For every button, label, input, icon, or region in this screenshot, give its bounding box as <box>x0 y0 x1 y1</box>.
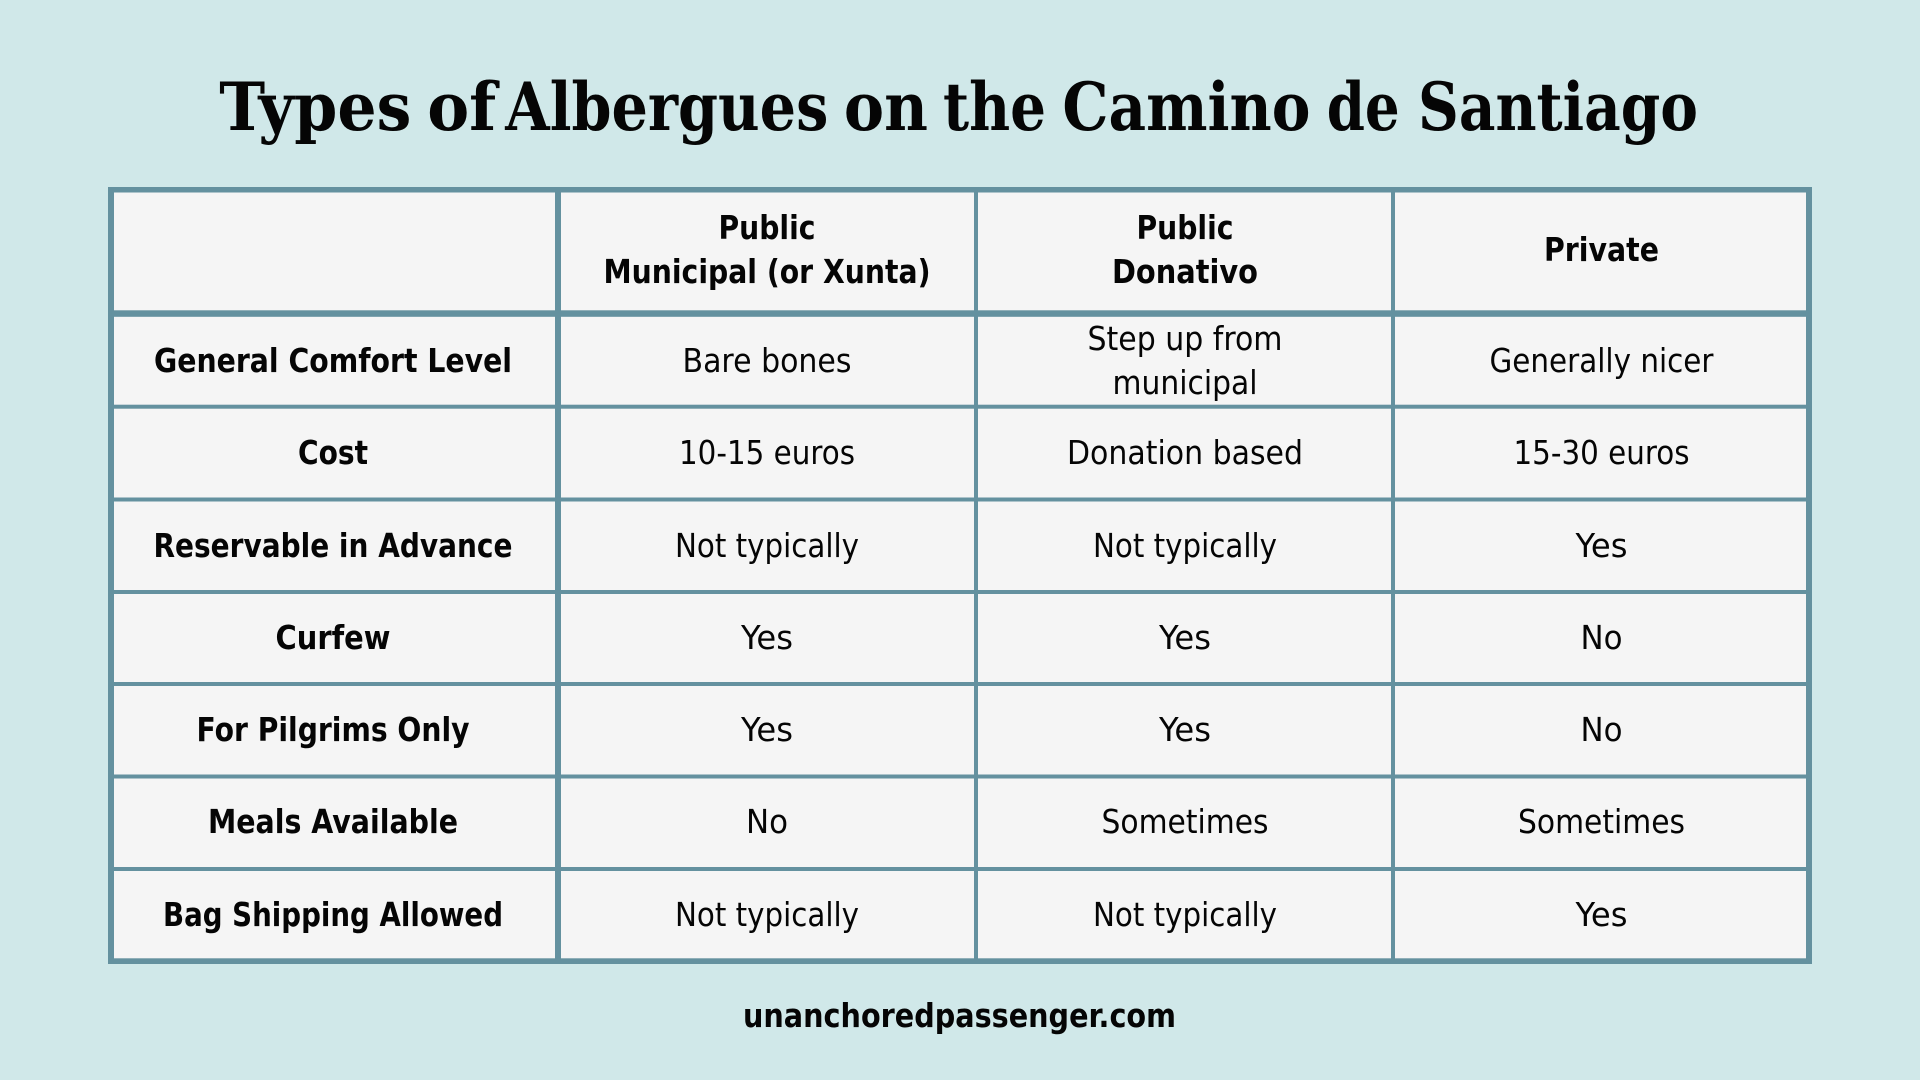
title <box>219 68 1698 146</box>
title: Santiago <box>1418 68 1698 146</box>
row: bag shipping allowed: Bag Shipping Allowed <box>163 896 503 934</box>
row: reservable in advance <box>154 527 1628 565</box>
row: general comfort level: General Comfort Level <box>154 342 512 380</box>
title: on <box>844 68 928 146</box>
row: reservable in advance: Not typically <box>675 527 859 565</box>
column headers: Private <box>1544 231 1659 269</box>
title: of <box>427 68 500 146</box>
row: general comfort level: municipal <box>1112 364 1258 402</box>
row: meals available: Sometimes <box>1102 803 1268 841</box>
row: cost: Cost <box>298 434 368 472</box>
column headers: Public <box>1136 209 1234 247</box>
row: for pilgrims only <box>196 711 1622 749</box>
row: cost <box>298 434 1690 472</box>
row: meals available: No <box>746 803 788 841</box>
row: meals available: Sometimes <box>1518 803 1685 841</box>
title: de <box>1327 68 1400 146</box>
row: cost: Donation based <box>1067 434 1303 472</box>
row: bag shipping allowed: Yes <box>1575 896 1628 934</box>
row: bag shipping allowed: Not typically <box>675 896 859 934</box>
comparison table <box>108 187 1812 964</box>
row: cost: 10-15 euros <box>679 434 855 472</box>
row: meals available: Meals Available <box>208 803 458 841</box>
row: for pilgrims only: No <box>1580 711 1622 749</box>
row: bag shipping allowed <box>163 896 1628 934</box>
row: general comfort level: Generally nicer <box>1490 342 1714 380</box>
column headers <box>604 209 1659 291</box>
row: reservable in advance: Not typically <box>1093 527 1277 565</box>
row: cost: 15-30 euros <box>1514 434 1690 472</box>
footer website: unanchoredpassenger.com <box>743 997 1176 1035</box>
column headers: Public <box>718 209 816 247</box>
title: Types <box>219 68 411 146</box>
row: curfew: Curfew <box>276 619 390 657</box>
row: for pilgrims only: For Pilgrims Only <box>196 711 470 749</box>
row: general comfort level: Bare bones <box>682 342 852 380</box>
row: curfew: Yes <box>1158 619 1211 657</box>
column headers: Municipal (or Xunta) <box>604 253 930 291</box>
title: Camino <box>1062 68 1310 146</box>
row: curfew: Yes <box>740 619 793 657</box>
row: general comfort level: Step up from <box>1088 320 1282 358</box>
row: reservable in advance: Yes <box>1575 527 1628 565</box>
column headers: Donativo <box>1112 253 1258 291</box>
table background <box>108 187 1812 964</box>
row: meals available <box>208 803 1685 841</box>
row: for pilgrims only: Yes <box>740 711 793 749</box>
row: general comfort level <box>154 320 1714 402</box>
title: Albergues <box>504 68 828 146</box>
row: curfew: No <box>1580 619 1622 657</box>
row: reservable in advance: Reservable in Advance <box>154 527 512 565</box>
title: the <box>943 68 1046 146</box>
row: for pilgrims only: Yes <box>1158 711 1211 749</box>
row: bag shipping allowed: Not typically <box>1093 896 1277 934</box>
row: curfew <box>276 619 1622 657</box>
